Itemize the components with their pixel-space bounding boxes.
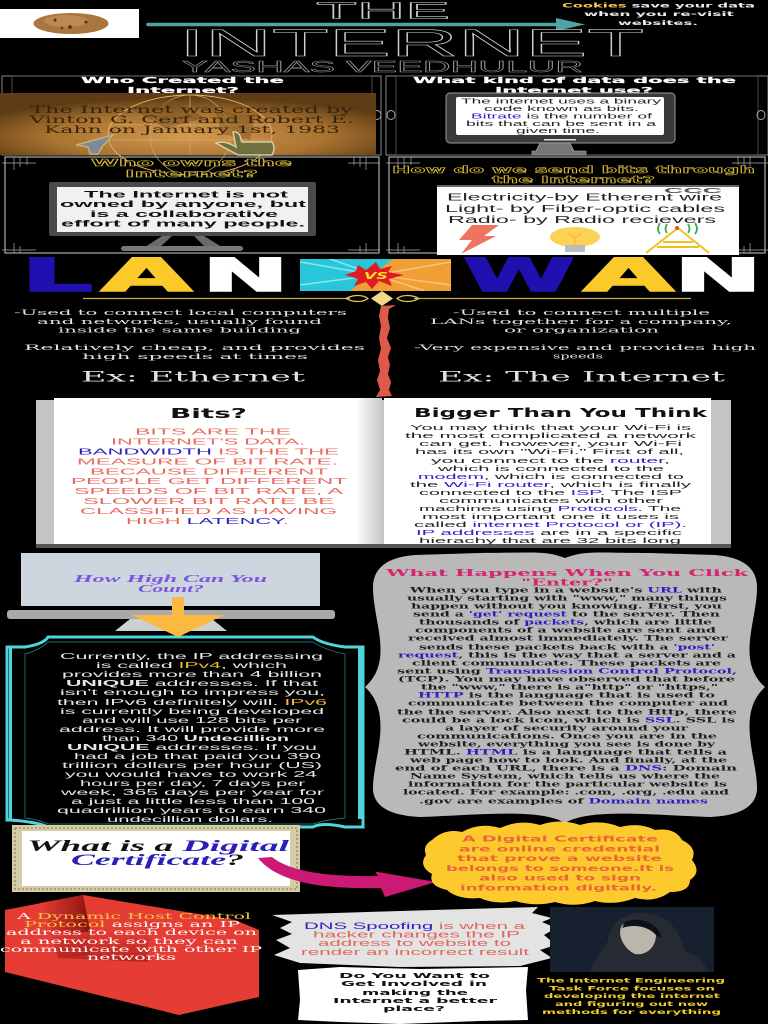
icon: versus burst: VS: [364, 271, 388, 282]
heading: WAN: W: [463, 249, 575, 302]
icon: monitor with ownership text: [49, 182, 316, 251]
panel: what is a digital certificate: [12, 825, 300, 892]
heading: WAN: [463, 249, 762, 302]
panel: DNS spoofing: address to website to: [318, 938, 511, 948]
text: IP addressing: UNIQUE addresses. If that: [66, 679, 320, 688]
text: internet engineering task force: methods for everything: [542, 1008, 722, 1016]
icon: hand cursor: [216, 132, 274, 155]
heading: what kind of data: What kind of data does the: [413, 76, 736, 85]
text: IP addressing: hours per day, 7 days per: [80, 779, 306, 788]
text: enter explanation: usually starting with "www," many things: [407, 594, 727, 602]
image: globe background: [0, 93, 376, 175]
heading: click enter: What Happens When You Click: [384, 569, 750, 579]
text: internet engineering task force: The Internet Engineering: [537, 976, 726, 984]
text: WAN description: [414, 308, 756, 386]
heading: LAN: N: [202, 249, 289, 302]
panel: dynamic host control protocol: A Dynamic Host Control: [15, 912, 252, 921]
text: enter explanation: received almost immediately. The server: [408, 634, 728, 642]
text: cookies note: when you re-visit: [584, 10, 734, 18]
text: IP addressing: undecillion dollars.: [107, 815, 273, 824]
text: WAN description: -Used to connect multiple: [453, 308, 711, 317]
text: bits page: INTERNET'S DATA.: [111, 436, 305, 446]
text: bigger than you think page: the most complicated a network: [405, 433, 697, 440]
text: enter explanation: sent using Transmission Control Protocol ,: [397, 666, 737, 676]
icon: monitor with bitrate text: The internet uses a binary: [461, 98, 662, 106]
text: bigger than you think page: [405, 406, 709, 545]
text: creators: [27, 105, 354, 136]
icon: arrow cursor: [76, 135, 113, 154]
heading: LAN: [21, 249, 289, 302]
heading: how do we send bits: the Internet?: [492, 175, 655, 186]
text: enter explanation: send a 'get' request to the server. Then: [413, 610, 721, 618]
panel: DNS spoofing: hacker changes the IP: [313, 930, 520, 940]
callout: digital certificate definition: are online credential: [459, 844, 660, 854]
text: enter explanation: [395, 586, 738, 806]
text: IP addressing: and will use 128 bits per: [82, 716, 303, 725]
text: bits page: PEOPLE GET DIFFERENT: [71, 476, 347, 486]
text: cookies note: websites.: [618, 19, 698, 27]
text: enter explanation: end of each URL, there is a DNS : Domain: [395, 764, 738, 772]
icon: monitor with bitrate text: [446, 93, 675, 155]
icon: monitor with bitrate text: code known as bits.: [484, 106, 639, 113]
heading: how do we send bits: [392, 165, 756, 186]
card: transmission media: Electricity-by Etherent wire: [447, 192, 723, 204]
text: LAN description: and networks, usually found: [37, 317, 322, 326]
text: enter explanation: the the server. Also next to the Http, there: [397, 708, 738, 716]
heading: who owns: Who owns the: [91, 158, 292, 169]
text: enter explanation: components of a website are sent and: [415, 626, 716, 634]
text: enter explanation: web page how to look. And finally, at the: [408, 756, 728, 764]
text: LAN description: [14, 308, 365, 386]
text: bits page: SPEEDS OF BIT RATE, A: [74, 486, 344, 496]
panel: get involved note: Get Involved in: [341, 980, 487, 988]
heading: who created: Internet?: [127, 86, 240, 95]
text: IP addressing: isn't enough to impress you,: [60, 688, 325, 697]
card: transmission media: Radio- by Radio recievers: [448, 215, 716, 226]
text: enter explanation: When you type in a website's URL with: [408, 586, 723, 594]
text: IP addressing: is currently being developed: [60, 707, 324, 716]
text: enter explanation: communications. Once you are in the: [417, 732, 718, 740]
heading: digital certificate: [27, 838, 291, 869]
text: enter explanation: website, everything you see is done by: [416, 740, 716, 748]
text: bits page: BITS ARE THE: [135, 426, 292, 436]
divider ornament: [83, 291, 691, 306]
text: cookies note: Cookies save your data: [562, 2, 755, 10]
text: bigger than you think page: connected to the ISP . The ISP: [419, 490, 683, 497]
text: IP addressing: UNIQUE addresses. If you: [67, 743, 317, 752]
panel: DNS spoofing: [272, 907, 556, 967]
text: bits page: BECAUSE DIFFERENT: [90, 466, 328, 476]
text: bigger than you think page: the Wi-Fi router , which is finally: [410, 482, 692, 489]
text: LAN description: Relatively cheap, and provides: [24, 343, 365, 352]
icon: versus burst: [300, 259, 451, 291]
panel: get involved note: place?: [383, 1005, 445, 1013]
text: bigger than you think page: which is connected to the: [435, 466, 664, 473]
text: IP addressing: provides more than 4 billion: [62, 670, 322, 679]
text: enter explanation: information for the particular website is: [408, 780, 727, 788]
panel: get involved note: Internet a better: [333, 997, 498, 1005]
heading: how high can you count: How High Can You: [72, 573, 267, 585]
panel: DNS spoofing: DNS Spoofing is when a: [304, 921, 525, 931]
text: bigger than you think page: IP addresses are in a specific: [416, 530, 683, 537]
text: cookies note: [562, 2, 755, 27]
text: enter explanation: a layer of security around your: [445, 724, 688, 732]
text: WAN description: LANs together for a company,: [430, 317, 732, 326]
text: LAN description: inside the same building: [58, 326, 301, 334]
heading: who owns: [91, 158, 292, 180]
text: bits page: BANDWIDTH IS THE THE: [78, 446, 340, 456]
text: IP addressing: [57, 652, 328, 824]
heading: how do we send bits: How do we send bits through: [392, 165, 756, 176]
text: enter explanation: communicate between the computer and: [408, 698, 728, 708]
text: enter explanation: request , this is the way that a server and a: [398, 650, 736, 660]
image: hooded hacker: [550, 907, 714, 972]
text: bigger than you think page: You may think that your Wi-Fi is: [410, 425, 692, 432]
text: IP addressing: week, 365 days per year for: [58, 788, 325, 797]
text: bigger than you think page: can get. however, your Wi-Fi: [419, 441, 683, 448]
text: enter explanation: could be a lock icon, which is SSL . SSL is: [402, 716, 735, 724]
heading: LAN vs WAN: [30, 257, 754, 292]
text: bigger than you think page: called internet Protocol or (IP) .: [414, 522, 687, 529]
panel: dynamic host control protocol: a network so they can: [20, 937, 238, 946]
text: enter explanation: client communicate. These packets are: [412, 658, 722, 668]
text: IP addressing: trillion dollars per hour (US): [62, 761, 323, 770]
heading: who owns: Internet?: [125, 169, 258, 180]
text: bits page: SLOWER BIT RATE BE: [83, 496, 335, 506]
text: creators: Kahn on January 1st, 1983: [44, 125, 340, 136]
title: INTERNET: [179, 23, 644, 65]
text: bigger than you think page: machines using Protocols . The: [419, 506, 681, 513]
text: LAN description: Ex: Ethernet: [81, 370, 306, 386]
text: enter explanation: HTML. HTML is a language that tells a: [404, 748, 728, 756]
callout: digital certificate definition: A Digital Certificate: [462, 834, 659, 844]
heading: click enter: "Enter?": [521, 578, 613, 588]
heading: WAN: N: [674, 249, 762, 302]
title: [179, 0, 644, 76]
text: bits page: MEASURE OF BIT RATE.: [77, 456, 338, 466]
text: WAN description: -Very expensive and provides high: [414, 343, 756, 352]
text: internet engineering task force: and figuring out new: [555, 1000, 708, 1008]
heading: what kind of data: [413, 76, 736, 95]
text: creators: Vinton G. Cerf and Robert E.: [27, 115, 354, 126]
text: IP addressing: had a job that paid you 390: [74, 752, 322, 761]
card: transmission media: CCC: [664, 188, 722, 195]
text: WAN description: Ex: The Internet: [438, 370, 726, 386]
text: bits page: CLASSIFIED AS HAVING: [80, 506, 337, 516]
text: internet engineering task force: Task Force focuses on: [549, 984, 716, 992]
panel: how high can you count monitor: [7, 553, 335, 631]
text: bits page: Bits?: [170, 407, 247, 422]
text: enter explanation: happen without you knowing. First, you: [411, 602, 723, 610]
panel: who owns the internet: [2, 157, 380, 253]
text: enter explanation: Name System, which tells us where the: [410, 772, 721, 780]
icon: lightning bolt: [459, 225, 499, 254]
text: LAN description: -Used to connect local computers: [14, 308, 347, 317]
panel: dynamic host control protocol: networks: [87, 953, 176, 962]
heading: LAN: A: [101, 249, 192, 302]
heading: digital certificate: Certificate ?: [71, 852, 245, 869]
text: enter explanation: sends these packets back with a 'post': [419, 642, 715, 652]
icon: monitor with bitrate text: given time.: [516, 128, 600, 135]
icon: monitor with ownership text: owned by anyone, but: [60, 199, 306, 209]
heading: who created: [81, 76, 284, 95]
heading: how high can you count: Count?: [138, 583, 205, 595]
callout: digital certificate definition: that prove a website: [457, 853, 663, 863]
icon: radio tower: [646, 223, 709, 253]
icon: monitor with ownership text: is a collaborative: [90, 209, 278, 219]
panel: what happens when you click enter: [365, 552, 765, 823]
arrow: cookie to text: [148, 18, 585, 31]
icon: monitor with ownership text: effort of many people.: [61, 218, 305, 228]
text: LAN description: high speeds at times: [82, 352, 308, 361]
icon: cookie photo: [0, 9, 139, 38]
arrow: magenta curved arrow: [258, 857, 436, 897]
text: internet engineering task force: developing the internet: [544, 992, 720, 1000]
text: IP addressing: quadrillion years to earn 340: [57, 806, 327, 815]
text: bigger than you think page: hierachy that are 32 bits long: [419, 538, 681, 545]
text: enter explanation: the "www," there is a"http" or "https,": [421, 682, 718, 692]
icon: monitor with bitrate text: Bitrate is the number of: [471, 114, 652, 120]
callout: digital certificate definition: belongs to someone.It is: [446, 863, 674, 873]
text: bigger than you think page: most important one it uses is: [422, 514, 680, 521]
text: bigger than you think page: modem , which is connected to: [418, 474, 684, 481]
panel: IP addressing frame: [7, 637, 363, 827]
text: IP addressing: then IPv6 definitely will. IPv6: [57, 698, 328, 707]
panel: dynamic host control protocol: Protocol assigns an IP: [24, 920, 241, 929]
text: bigger than you think page: Bigger Than You Think: [414, 406, 709, 420]
callout: digital certificate definition: [423, 822, 697, 905]
heading: click enter: [384, 569, 750, 588]
text: bits page: HIGH LATENCY .: [126, 516, 289, 526]
text: bigger than you think page: you connect to the router ,: [431, 458, 670, 465]
heading: who created: Who Created the: [81, 76, 284, 85]
icon: light bulb: [550, 227, 600, 252]
icon: monitor with bitrate text: bits that can be sent in a: [466, 121, 656, 128]
text: bigger than you think page: communicates with other: [439, 498, 665, 505]
text: enter explanation: (TCP). You may have observed that before: [398, 674, 736, 684]
title: YASHAS VEEDHULUR: [182, 59, 583, 76]
panel: get involved note: Do You Want to: [339, 972, 490, 980]
text: bits page: [71, 407, 347, 526]
text: enter explanation: located. For example: .com, .org, .edu and: [403, 788, 729, 796]
text: internet engineering task force: [537, 976, 726, 1016]
heading: what kind of data: internet use?: [495, 86, 654, 95]
heading: how high can you count: [72, 573, 267, 595]
panel: what kind of data: [386, 76, 768, 155]
panel: dynamic host control protocol: address to each device on: [6, 928, 257, 937]
text: IP addressing: a just a little less than 100: [71, 797, 316, 806]
heading: WAN: A: [583, 249, 674, 302]
panel: dynamic host control protocol: [0, 895, 263, 1015]
panel: open book: [36, 398, 731, 548]
panel: DNS spoofing: render an incorrect result: [301, 947, 530, 957]
text: creators: The Internet was created by: [30, 105, 354, 116]
card: transmission media: Light- by Fiber-optic cables: [445, 204, 725, 215]
icon: monitor with ownership text: The Internet is not: [84, 190, 288, 200]
panel: get involved note: making the: [362, 989, 469, 997]
card: transmission media: [437, 185, 739, 255]
callout: digital certificate definition: information digitally.: [460, 882, 657, 892]
panel: get involved note: [298, 967, 528, 1024]
panel: who created the internet: [0, 76, 381, 175]
text: IP addressing: than 340 Undecillion: [102, 734, 289, 743]
text: bigger than you think page: has its own "Wi-Fi." First of all,: [415, 449, 684, 456]
text: enter explanation: thousands of packets , which are little: [419, 618, 713, 626]
text: IP addressing: Currently, the IP addressing: [60, 652, 323, 661]
text: IP addressing: is called IPv4 , which: [96, 661, 287, 670]
heading: digital certificate: What is a Digital: [27, 838, 291, 855]
text: enter explanation: .gov are examples of Domain names: [419, 796, 708, 806]
panel: dynamic host control protocol: communicate with other IP: [0, 945, 263, 954]
text: enter explanation: HTTP is the language that is used to: [418, 690, 715, 700]
text: WAN description: speeds: [553, 352, 603, 360]
callout: digital certificate definition: also used to sign: [479, 872, 641, 882]
text: WAN description: or organization: [504, 326, 659, 334]
text: IP addressing: address. It will provide more: [59, 725, 326, 734]
divider: red torn line: [376, 305, 396, 397]
heading: LAN: L: [21, 249, 93, 302]
arrow: gold down arrow: [132, 597, 224, 637]
panel: how do we send bits: [386, 157, 768, 255]
text: IP addressing: you would have to work 24: [65, 770, 318, 779]
